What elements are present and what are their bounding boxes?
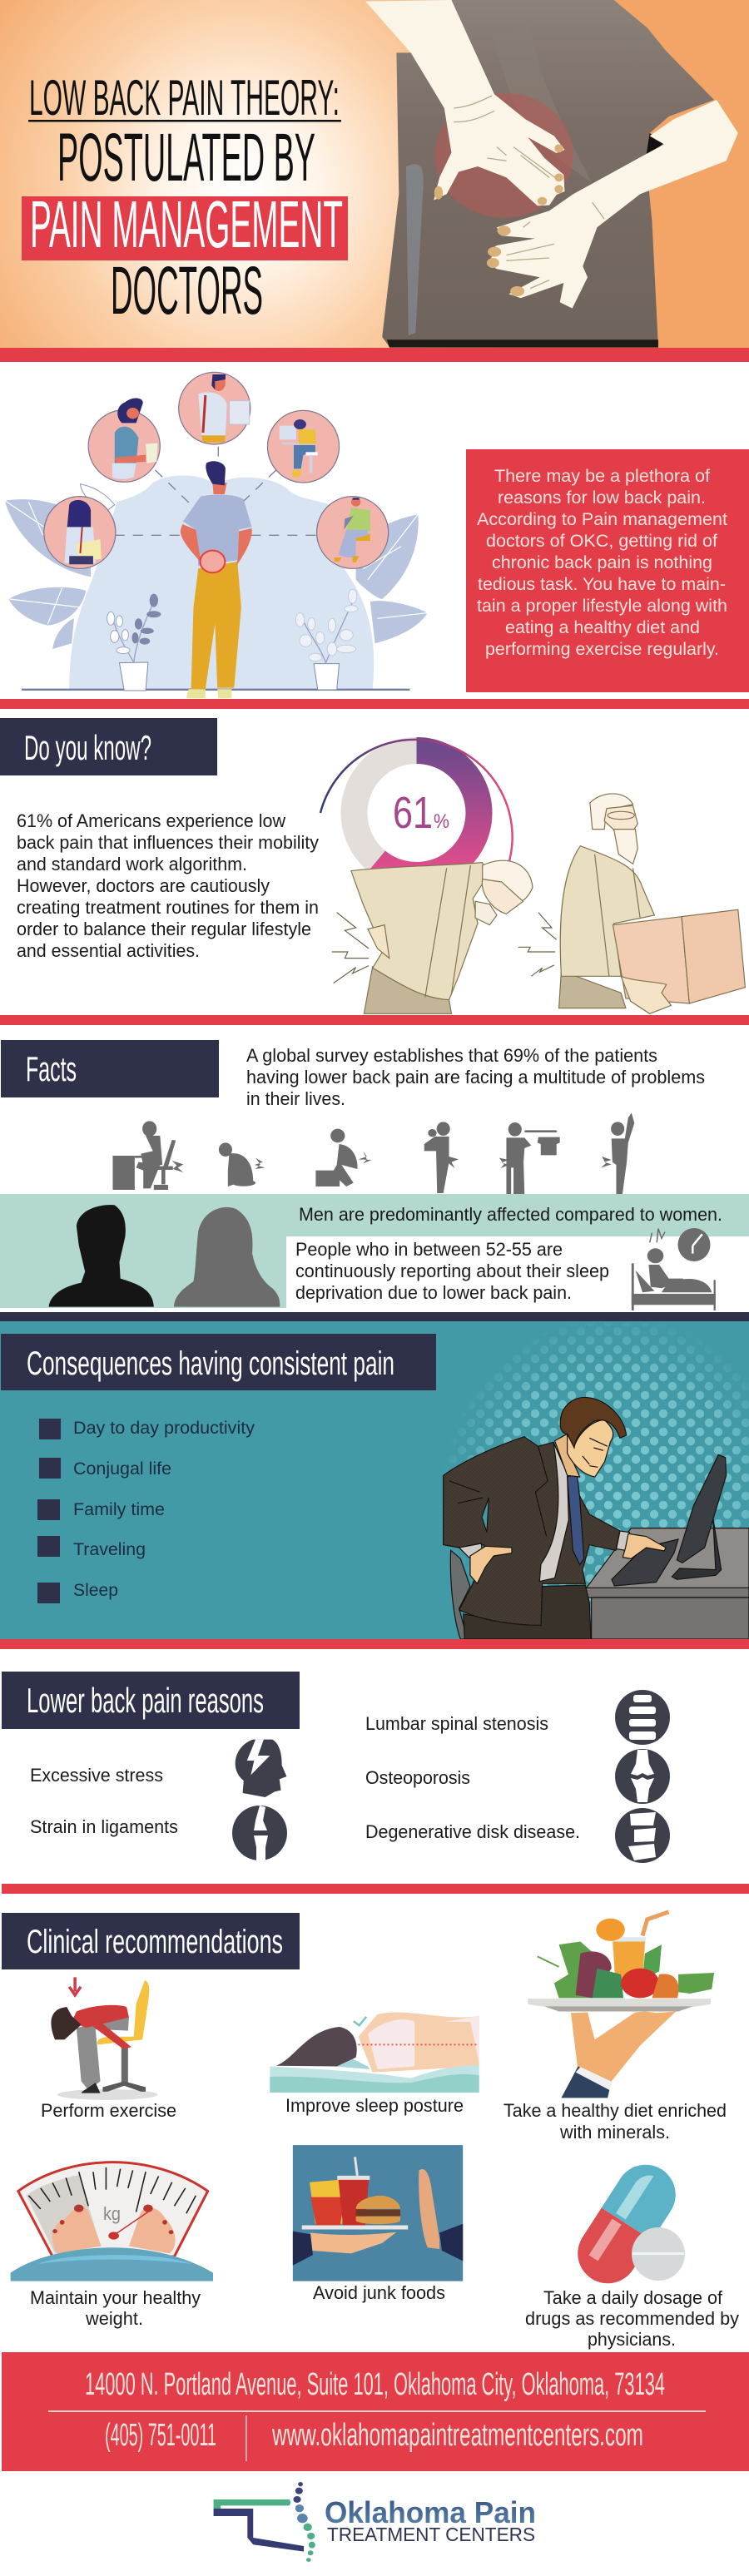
panel: men vs women: Men are predominantly affected compared to women.: [299, 1204, 722, 1225]
recommendation: healthy diet: Take a healthy diet enriched: [503, 2100, 727, 2121]
illustration: businessman at desk: [444, 1397, 749, 1639]
list: consequences: Sleep: [73, 1581, 118, 1600]
logo: Oklahoma Pain: [325, 2495, 536, 2529]
list: reasons: Osteoporosis: [365, 1767, 470, 1788]
heading: clinical recommendations: Clinical recommendations: [27, 1924, 283, 1960]
text block: sleep deprivation: deprivation due to lower back pain.: [295, 1282, 572, 1303]
text block: do you know: creating treatment routines for them in: [17, 897, 319, 918]
text block: do you know: and standard work algorithm.: [17, 854, 247, 874]
text block: do you know: 61% of Americans experience low: [17, 810, 285, 831]
recommendation: healthy weight: [11, 2162, 213, 2329]
icon: osteoporosis joint: [615, 1749, 670, 1804]
list: consequences: Conjugal life: [73, 1459, 171, 1479]
title: POSTULATED BY: [57, 120, 315, 196]
recommendation: daily dosage: [525, 2153, 739, 2350]
recommendation: healthy diet: [503, 1912, 727, 2143]
text block: do you know: However, doctors are cautiously: [17, 875, 270, 896]
list: consequences: Family time: [73, 1500, 165, 1519]
heading: clinical recommendations: [2, 1913, 300, 1969]
bubble figures: [64, 374, 370, 564]
recommendation: sleep posture: [270, 2012, 479, 2116]
title: [22, 70, 348, 329]
text block: do you know: and essential activities.: [17, 940, 200, 961]
heading: facts: [1, 1040, 219, 1097]
title: DOCTORS: [111, 253, 263, 329]
icon: head with lightning: [236, 1740, 286, 1797]
recommendation: healthy weight: weight.: [85, 2308, 143, 2329]
icon: bed and clock: [632, 1228, 716, 1310]
panel: consequences: [0, 1321, 749, 1639]
illustration: man with back pain and causes: [5, 372, 428, 698]
list: reasons: Degenerative disk disease.: [365, 1821, 580, 1842]
recommendation: daily dosage: Take a daily dosage of: [543, 2287, 723, 2308]
text block: facts: in their lives.: [246, 1088, 345, 1109]
heading: lower back pain reasons: Lower back pain reasons: [27, 1681, 264, 1720]
icons: painful activities: [112, 1112, 634, 1194]
recommendation: avoid junk food: Avoid junk foods: [313, 2282, 445, 2303]
donut chart: 61%: %: [434, 810, 449, 833]
illustration: older men with back pain: [332, 794, 745, 1013]
callout: intro text: reasons for low back pain.: [498, 488, 706, 508]
text block: sleep deprivation: [295, 1239, 609, 1303]
recommendation: healthy weight: kg: [103, 2203, 121, 2224]
icon: lumbar spine: [615, 1690, 670, 1745]
text block: facts: [246, 1045, 705, 1109]
recommendation: avoid junk food: [293, 2145, 463, 2303]
text block: do you know: back pain that influences their mobility: [17, 832, 319, 853]
illustration: person holding lower back: [365, 0, 738, 348]
text block: sleep deprivation: continuously reporting about their sleep: [295, 1261, 609, 1281]
list: reasons: Lumbar spinal stenosis: [365, 1713, 548, 1734]
list: reasons: [30, 1713, 580, 1842]
callout: intro text: There may be a plethora of: [494, 467, 710, 486]
text block: do you know: order to balance their regular lifestyle: [17, 919, 311, 939]
recommendation: healthy diet: with minerals.: [559, 2122, 670, 2143]
footer: contact details: [2, 2352, 749, 2471]
heading: consequences: Consequences having consistent pain: [27, 1345, 394, 1382]
cause bubbles: [44, 372, 389, 568]
logo: [214, 2482, 536, 2562]
heading: consequences: [1, 1334, 436, 1390]
silhouettes: [49, 1205, 280, 1307]
hero panel: PAIN MANAGEMENT: [30, 187, 343, 261]
callout: intro text: [466, 449, 749, 692]
heading: do you know: Do you know?: [24, 728, 151, 767]
icon: strained joint: [232, 1806, 287, 1861]
recommendation: daily dosage: drugs as recommended by: [525, 2308, 739, 2329]
plants and pots: [107, 589, 358, 691]
heading: do you know: [0, 718, 217, 775]
recommendation: sleep posture: Improve sleep posture: [285, 2095, 464, 2116]
panel: men vs women: [0, 1194, 749, 1308]
list: reasons: Excessive stress: [30, 1765, 163, 1786]
callout: intro text: eating a healthy diet and: [505, 618, 700, 637]
text block: sleep deprivation: People who in between 52-55 are: [295, 1239, 563, 1260]
text block: facts: A global survey establishes that 69% of the patients: [246, 1045, 657, 1066]
text block: do you know: [17, 810, 319, 961]
list: consequences: [37, 1419, 255, 1603]
list: reasons: Strain in ligaments: [30, 1816, 178, 1837]
footer: contact details: (405) 751-0011: [105, 2418, 216, 2453]
heading: facts: Facts: [26, 1049, 77, 1088]
logo: TREATMENT CENTERS: [327, 2524, 535, 2545]
heading: lower back pain reasons: [2, 1672, 300, 1729]
callout: intro text: doctors of OKC, getting rid of: [486, 532, 717, 551]
recommendation: exercise: Perform exercise: [41, 2100, 176, 2121]
donut chart: 61%: 61: [393, 788, 433, 838]
title: LOW BACK PAIN THEORY:: [29, 70, 340, 126]
callout: intro text: According to Pain management: [477, 510, 727, 529]
icon: degenerative disk: [615, 1808, 670, 1863]
recommendation: exercise: [41, 1977, 176, 2121]
hero panel: [0, 0, 749, 348]
callout: intro text: tedious task. You have to main-: [478, 575, 726, 594]
recommendation: daily dosage: physicians.: [588, 2329, 676, 2350]
callout: intro text: tain a proper lifestyle along with: [477, 597, 727, 616]
recommendation: healthy weight: Maintain your healthy: [30, 2287, 201, 2308]
callout: intro text: performing exercise regularly.: [485, 640, 719, 659]
text block: facts: having lower back pain are facing a multitude of problems: [246, 1067, 705, 1087]
list: consequences: Traveling: [73, 1540, 146, 1559]
donut chart: 61%: [320, 740, 513, 875]
callout: intro text: chronic back pain is nothing: [492, 553, 712, 572]
figure: man: [181, 461, 252, 698]
list: consequences: Day to day productivity: [73, 1419, 255, 1438]
